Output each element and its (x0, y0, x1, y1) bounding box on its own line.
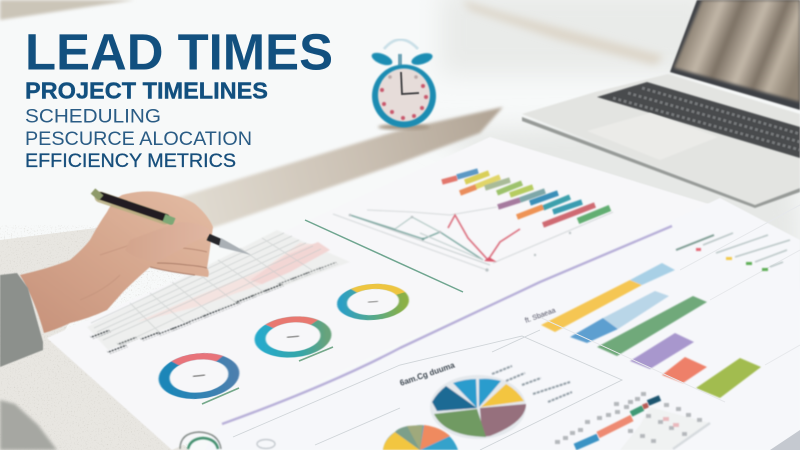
second pie chart (383, 425, 458, 450)
title: LEAD TIMES (25, 24, 333, 80)
spreadsheet table (87, 230, 350, 354)
line chart (333, 207, 613, 272)
jacket sleeve (0, 273, 43, 367)
colored gantt bars (442, 171, 610, 225)
pie chart panel outline (233, 330, 622, 450)
donut underline 1 (202, 388, 239, 404)
divider line: green (305, 220, 463, 292)
line: efficiency metrics: EFFICIENCY METRICS (25, 150, 236, 172)
line: resource allocation: PESCURCE ALOCATION (25, 128, 252, 150)
heatmap calendar (555, 392, 710, 450)
wood table strip (170, 107, 503, 235)
donut chart 2 (259, 317, 327, 357)
subtitle: PROJECT TIMELINES (25, 78, 268, 104)
donut chart 1 (162, 353, 236, 399)
thumb over pen (125, 222, 210, 262)
divider line: purple (222, 226, 672, 424)
alarm clock (370, 40, 436, 130)
laptop (522, 0, 800, 208)
report sheet: bars and pie (205, 198, 800, 450)
bar chart legend (676, 233, 790, 271)
hand: palm and fingers (20, 191, 213, 333)
blurred shoulder (0, 400, 57, 450)
pie chart heading: 6am.Cg duuma (399, 361, 456, 388)
small ring icon (180, 432, 275, 449)
pie chart (430, 375, 526, 439)
pen (93, 191, 251, 255)
donut chart 3 (341, 284, 405, 320)
bar chart heading: ft. Sbaeaa (524, 307, 557, 325)
bar chart grid lines (535, 205, 800, 402)
donut underline 2 (299, 347, 333, 361)
bar chart (541, 263, 761, 398)
desk corner bottom right (770, 430, 800, 450)
report sheet: table and donuts (47, 137, 712, 450)
line: scheduling: SCHEDULING (25, 106, 161, 128)
pie chart legend (492, 366, 572, 402)
